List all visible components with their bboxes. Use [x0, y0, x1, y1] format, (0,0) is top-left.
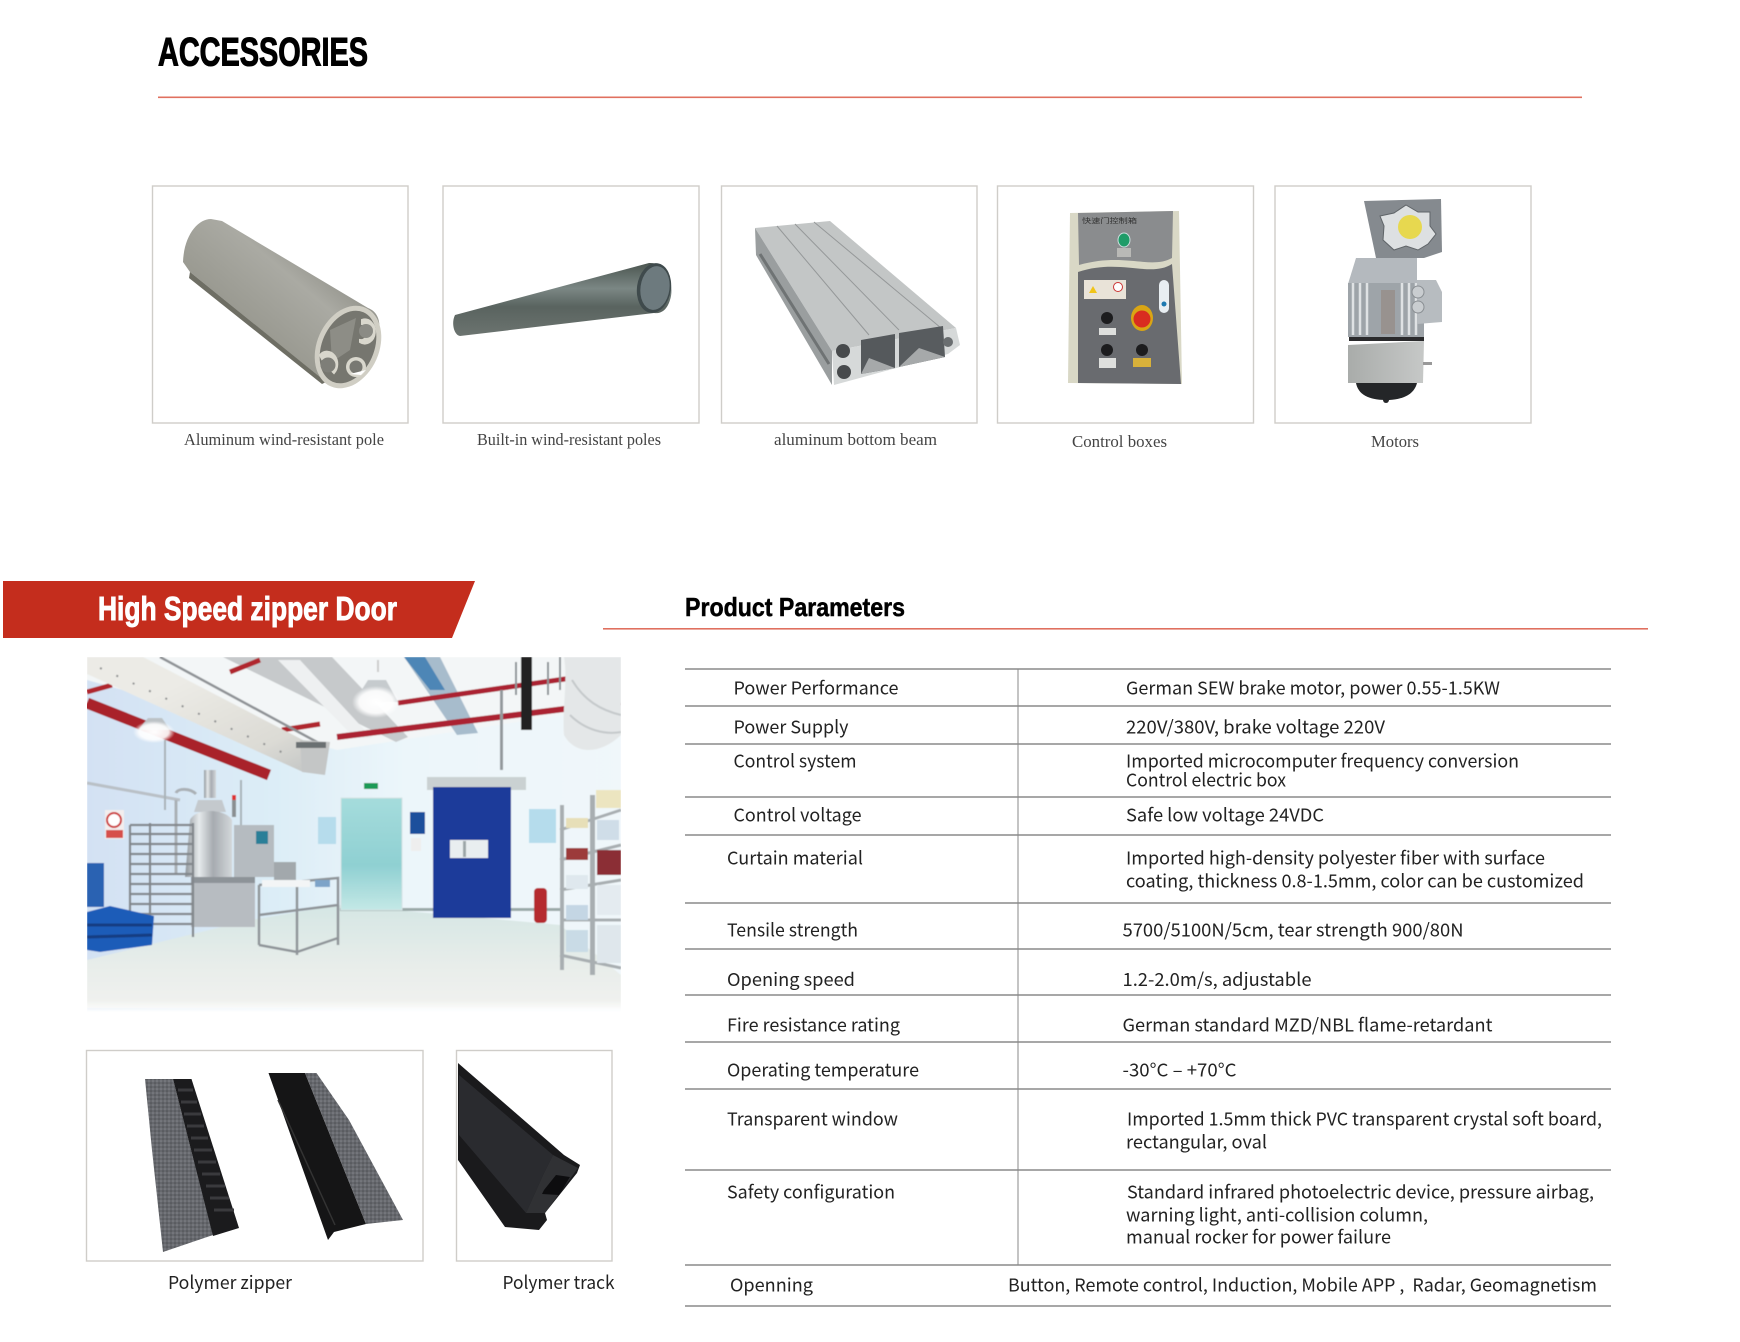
row: power performance [734, 674, 1500, 700]
row: operating temperature: Operating temperature [727, 1056, 919, 1082]
ceiling trays [223, 657, 408, 742]
image: control box: 快速门控制箱 [1082, 216, 1137, 226]
image: motor [1348, 199, 1442, 403]
row: transparent window [727, 1106, 1602, 1154]
row: opening speed [727, 966, 1312, 992]
shelves [560, 805, 564, 970]
blue pallets [87, 863, 104, 907]
row: safety configuration: warning light, anti-collision column, [1126, 1202, 1428, 1228]
caption: Built-in wind-resistant poles [477, 430, 661, 449]
glass door [341, 798, 402, 910]
image: aluminum beam [755, 221, 960, 385]
no-smoking sign [105, 810, 124, 839]
caption: Aluminum wind-resistant pole [184, 430, 384, 449]
image: control box [1068, 211, 1182, 384]
row: fire resistance rating [727, 1012, 1493, 1038]
rack [130, 823, 193, 937]
image: aluminum pole [183, 219, 394, 399]
tank + machine [204, 770, 216, 798]
row: safety configuration: Safety configuration [727, 1178, 895, 1204]
row: curtain material [727, 844, 1584, 894]
row: control voltage: Safe low voltage 24VDC [1126, 802, 1324, 828]
banner: High Speed zipper Door: High Speed zipper Door [98, 590, 397, 627]
row: fire resistance rating: German standard MZD/NBL flame-retardant [1122, 1012, 1493, 1038]
row: openning: Openning [730, 1272, 813, 1298]
panel: polymer track [456, 1050, 615, 1295]
row: control voltage: Control voltage [734, 802, 862, 828]
fabric duct [87, 657, 302, 772]
poster, extinguisher [529, 809, 556, 843]
image: zipper strips [145, 1073, 403, 1252]
heading: Product Parameters: Product Parameters [685, 592, 905, 622]
red pipes [87, 703, 269, 775]
caption: Polymer track [502, 1269, 615, 1295]
row: operating temperature: -30°C – +70°C [1122, 1056, 1236, 1082]
row: power performance: Power Performance [734, 674, 899, 700]
row: transparent window: rectangular, oval [1126, 1128, 1267, 1154]
row: curtain material: coating, thickness 0.8-1.5mm, color can be customized [1126, 868, 1584, 894]
row: safety configuration: manual rocker for power failure [1126, 1224, 1391, 1250]
lamps [377, 660, 379, 672]
row: control system: Control electric box [1126, 766, 1286, 792]
row: curtain material: Imported high-density polyester fiber with surface [1126, 844, 1545, 870]
row: operating temperature [727, 1056, 1236, 1082]
row: openning: Button, Remote control, Induction, Mobile APP , Radar, Geomagnetism [1008, 1272, 1597, 1298]
row: transparent window: Imported 1.5mm thick PVC transparent crystal soft board, [1127, 1106, 1602, 1132]
image: tapered pole [453, 261, 674, 336]
row: opening speed: Opening speed [727, 966, 855, 992]
cart [259, 878, 338, 955]
caption: Motors [1371, 432, 1419, 451]
row: safety configuration [727, 1178, 1594, 1250]
row: transparent window: Transparent window [727, 1106, 898, 1132]
row: opening speed: 1.2-2.0m/s, adjustable [1122, 966, 1312, 992]
title: ACCESSORIES: ACCESSORIES [158, 30, 368, 74]
row: power supply: 220V/380V, brake voltage 220V [1126, 714, 1386, 740]
wall pipe [87, 783, 180, 800]
row: tensile strength: 5700/5100N/5cm, tear strength 900/80N [1122, 916, 1464, 942]
row: power supply [734, 714, 1386, 740]
caption: Control boxes [1072, 432, 1167, 451]
row: curtain material: Curtain material [727, 844, 863, 870]
row: openning [730, 1272, 1597, 1298]
blue door [427, 777, 526, 790]
panel: built-in wind-resistant poles [443, 186, 699, 449]
panel: control boxes [998, 186, 1254, 451]
row: control system: Imported microcomputer frequency conversion [1126, 748, 1519, 774]
table: product parameters [685, 669, 1611, 1306]
image: track profile [458, 1063, 580, 1230]
panel: motors [1275, 186, 1531, 451]
panel: aluminum bottom beam [722, 186, 977, 449]
row: tensile strength [727, 916, 1464, 942]
row: safety configuration: Standard infrared photoelectric device, pressure airbag, [1127, 1178, 1594, 1204]
right round duct [564, 657, 621, 750]
caption: aluminum bottom beam [774, 430, 937, 449]
panel: polymer zipper [86, 1050, 423, 1295]
row: control system [734, 748, 1519, 792]
row: control system: Control system [734, 748, 856, 774]
row: fire resistance rating: Fire resistance rating [727, 1012, 900, 1038]
panel: aluminum wind-resistant pole [152, 186, 408, 449]
photo: cleanroom with blue high speed door [87, 657, 621, 1012]
row: control voltage [734, 802, 1324, 828]
banner: High Speed zipper Door [3, 581, 475, 638]
row: power supply: Power Supply [734, 714, 849, 740]
caption: Polymer zipper [168, 1269, 293, 1295]
row: power performance: German SEW brake motor, power 0.55-1.5KW [1126, 674, 1500, 700]
row: tensile strength: Tensile strength [727, 916, 858, 942]
